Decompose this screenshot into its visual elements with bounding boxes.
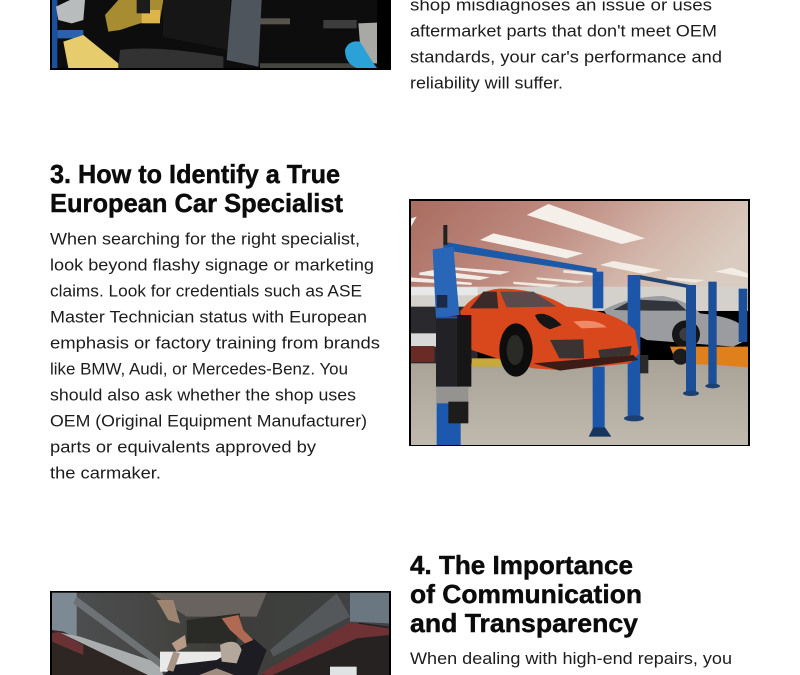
far lifts [628,275,640,418]
heading: section 4 [410,550,642,638]
body text: section 2 ending: aftermarket parts that don't meet OEM [410,22,717,40]
body text: section 3: OEM (Original Equipment Manufacturer) [50,412,367,430]
ceiling lights [527,204,645,244]
body text: section 3: like BMW, Audi, or Mercedes-Benz. You [50,360,348,378]
body text: section 4: When dealing with high-end repairs, you [410,650,732,668]
body text: section 3: When searching for the right specialist, [50,230,360,248]
body text: section 3: emphasis or factory training from brands [50,334,380,352]
far orange car [670,347,748,367]
silver car [603,296,747,347]
body text: section 3: should also ask whether the shop uses [50,386,356,404]
body text: section 3 [50,230,380,482]
body text: section 3: the carmaker. [50,464,161,482]
body text: section 2 ending [410,0,722,92]
body text: section 3: parts or equivalents approved by [50,438,317,456]
heading: section 4: of Communication [410,579,642,609]
orange Porsche [460,289,639,370]
heading: section 4: 4. The Importance [410,550,633,580]
body text: section 3: claims. Look for credentials such as ASE [50,282,362,300]
heading: section 4: and Transparency [410,608,639,638]
body text: section 3: Master Technician status with European [50,308,367,326]
photo: mechanic working under lifted car [50,591,391,675]
body text: section 2 ending: reliability will suffer. [410,74,563,92]
heading: section 3: 3. How to Identify a True [50,159,340,189]
body text: section 2 ending: standards, your car's performance and [410,48,722,66]
photo: orange Porsche on blue lift [409,199,750,446]
near column with control box [433,247,459,318]
near lift arm and column [443,242,597,273]
heading: section 3 [50,159,343,218]
photo: technician working beside car (top left) [50,0,391,70]
body text: section 3: look beyond flashy signage or marketing [50,256,374,274]
heading: section 3: European Car Specialist [50,188,343,218]
